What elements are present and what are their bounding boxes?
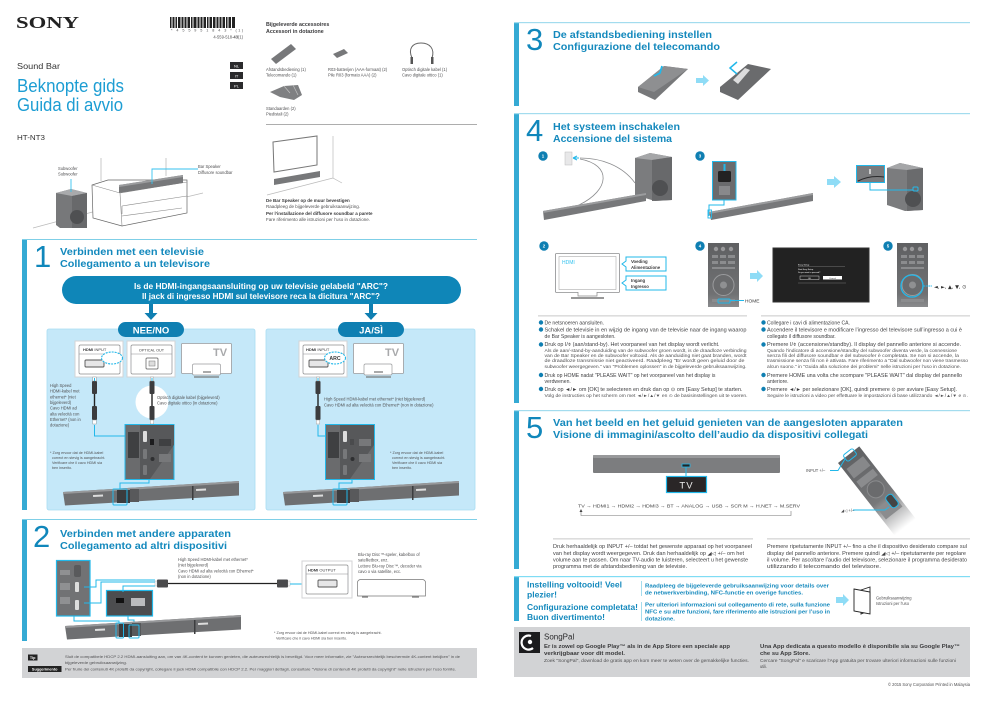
screen: easy setup: Cancel [829,278,836,280]
steps text: Italian: trasmissione senza fili non è attivata. Fare riferimento a "Dal subwoofer non viene trasmesso [767,358,969,363]
text: further information Dutch: Raadpleeg de bijgeleverde gebruiksaanwijzing voor details over [645,584,830,590]
accessory: optical cable [402,43,448,78]
step 3 badge [695,151,705,161]
label: HDMI cable: Cavo HDMI ad alta velocità con Ethernet* [178,568,254,573]
heading: setup complete: Configurazione completata! [527,602,638,612]
screen: easy setup: Do you want to proceed? [798,271,821,274]
illustration: plug in power cords [543,152,672,220]
card: optical out: OPTICAL OUT [139,348,165,352]
SongPal text: Dutch: Er is zowel op Google Play™ als in de App Store een speciale app [544,644,731,650]
label: direction keys: ◄, ►, ▲, ▼, ⊙ [934,284,966,290]
callout: input: Ingang [631,278,645,283]
label: HDMI cable: High Speed HDMI-kabel met ethernet* [178,557,248,562]
pill: NEE/NO [118,322,184,337]
heading: setup complete: Instelling voltooid! Veel [527,580,622,590]
instructions: Italian: display del pannello anteriore. Premere quindi ◢◁ +/– ripetutamente per regolare [767,551,966,557]
illustration: TV input HDMI [556,254,620,298]
steps text: Dutch: Schakel de televisie in en wijzig de ingang van de televisie naar de ingang waarop [544,328,747,334]
steps text: Italian: Seguire le istruzioni a video per effettuare le impostazioni di base utilizzando ◄/►/▲/▼ e ⊙. [767,393,968,398]
card: optical out [127,341,175,377]
label: subwoofer [58,166,78,176]
heading: setup complete: Buon divertimento! [527,612,605,622]
label: player device: Blu-ray Disc™-speler, kabelbox of [358,552,421,557]
rear panel detail [120,424,174,489]
SongPal text: Dutch: Zoek "SongPal", download de gratis app en kom meer te weten over de gemakkelijke functies. [544,658,749,663]
label: HDMI cable: alta velocità con [50,411,80,416]
label: player device: Lettore Blu-ray Disc™, decoder via [358,563,422,568]
sound bar front with display: TV [679,480,694,492]
icon: TV: TV [213,347,228,359]
illustration: wall-mounted bar speaker [267,136,342,195]
footnote: cable check: * Zorg ervoor dat de HDMI-kabel correct en stevig is aangebracht. [274,631,382,635]
wall-mount note: Fare riferimento alle istruzioni per l’uso in dotazione. [266,217,370,222]
screen: easy setup [773,248,869,302]
remote: battery compartment open [720,62,771,100]
section 5 heading [553,417,903,441]
footnote: cable check: * Zorg ervoor dat de HDMI-kabel [390,451,443,455]
SongPal text: Italian [760,644,960,669]
accessory: batteries [328,49,388,78]
step 1 badge [538,151,548,161]
sound bar front with display [593,455,780,492]
SongPal text: Italian: Una App dedicata a questo modello è disponibile sia su Google Play™ [760,644,960,650]
arrow [827,176,841,188]
screen: easy setup: Start Easy Setup. [798,268,814,271]
pill: JA/SI: JA/SÌ [359,326,383,336]
label: HDMI cable [178,557,254,579]
heading: supplied accessories: Bijgeleverde accessoires [266,22,329,28]
label: HDMI cable: HDMI-kabel met [50,389,80,394]
frame [514,576,519,621]
HDMI cable [155,580,290,588]
footer: © 2015 Sony Corporation Printed in Malaysia [888,682,971,687]
tip badge: Tip [30,656,36,660]
step 2 badge: 2 [543,244,546,249]
label: HDMI cable: (niet bijgeleverd) [178,563,209,568]
section 4 heading [553,122,680,145]
label: HDMI cable: Cavo HDMI ad [50,406,78,411]
model name: HT-NT3 [17,135,45,142]
language badges: IT [235,73,239,78]
card: HDMI input ARC: HDMI INPUT [306,347,330,352]
screen: easy setup: Easy Setup [798,264,810,266]
label: HDMI cable: ethernet* (niet [50,394,77,399]
footnote: cable check: correct en stevig is aangebracht. [392,456,445,460]
label: HDMI cable: dotazione) [50,423,70,428]
language badges: NL [234,63,240,68]
instructions: Italian: Premere ripetutamente INPUT +/– fino a che il dispositivo desiderato compare sul [767,544,967,550]
question pill: Is de HDMI-ingangsaansluiting op uw televisie gelabeld "ARC"? [134,282,388,291]
footnote: cable check: Verificare che il cavo HDMI sia [52,461,103,465]
footnote: cable check: Verificare che il cavo HDMI sia [392,461,443,465]
instructions: Dutch: volume aan te passen. Om naar TV-audio te luisteren, selecteert u het gewenste [553,558,748,564]
heading: SongPal: SongPal [544,632,574,642]
tip badge [28,654,38,660]
text: further information Italian: Per ulteriori informazioni sul collegamento di rete, sulla funzione [645,602,830,608]
label: HDMI cable [324,397,434,407]
question pill [62,276,461,304]
card: HDMI output [302,561,352,598]
step 2 badge [539,241,549,251]
cyan connection lines [74,580,315,625]
steps text: Dutch: de draadloze transmissie niet geactiveerd. Raadpleeg "Er wordt geen geluid door de [544,358,745,363]
SongPal text: Italian: Cercare "SongPal" e scaricare l’App gratuita per trovare ulteriori informazioni sulle funzioni [760,658,956,663]
bar speaker rear [65,615,241,640]
section: setup complete [514,576,970,622]
label: HDMI cable [50,383,81,428]
title [17,75,124,115]
section 2 heading: Collegamento ad altri dispositivi [60,541,227,552]
illustration: TV input HDMI: HDMI [562,260,575,266]
section 4: power on [514,113,970,403]
label: bar speaker: Bar Speaker [198,164,221,169]
label: volume: ◢◁ +/– [841,508,855,513]
footnote: cable check [390,451,445,470]
card: HDMI input [75,341,123,377]
steps text: Italian: alcun suono." in "Guida alla soluzione dei problemi" nelle istruzioni per l’uso in dotazione. [767,364,961,369]
instructions: Italian: utilizzando il telecomando del televisore. [767,564,881,570]
card: HDMI input ARC: ARC [329,356,341,362]
illustration: sound bar and subwoofer on TV stand [33,158,203,228]
label: HOME: HOME [745,298,759,304]
accessory: stands: Standaarden (2) [266,106,296,111]
tip text [65,655,460,672]
section 3 heading: De afstandsbediening instellen [553,30,712,41]
instructions: Dutch: van het display wordt weergegeven. Druk dan herhaaldelijk op ◢◁ +/– om het [553,551,745,557]
steps text: Dutch: van de Bar Speaker en de subwoofer voltooid. Als de aanduiding niet gaat branden, wordt [544,353,748,358]
step 3 badge: 3 [699,154,702,159]
steps text: Dutch: verdwenen. [544,379,571,385]
sony logo: SONY [16,13,79,32]
callout: power: Alimentazione [631,265,661,270]
section 1 number: 1 [34,239,51,274]
bar speaker rear [63,481,239,506]
label: HDMI cable: High Speed [50,383,72,388]
accessory: optical cable: Cavo digitale ottico (1) [402,72,443,78]
label: HDMI cable: Cavo HDMI ad alta velocità con Ethernet* (non in dotazione) [324,402,434,407]
wall-mount note: De Bar Speaker op de muur bevestigen [266,198,350,203]
section 3 frame [514,22,519,106]
heading: supplied accessories: Accessori in dotazione [266,29,324,35]
sound bar input panel [56,560,152,616]
steps text: Dutch: Druk op ◄/► om [OK] te selecteren en druk dan op ⊙ om [Easy Setup] te starten. [544,387,742,393]
steps text: Dutch: Volg de instructies op het scherm om met ◄/►/▲/▼ en ⊙ de basisinstellingen uit te voeren. [544,393,748,398]
remote: HOME button [708,243,744,307]
footnote: cable check: ben inserito. [52,466,72,470]
label: bar speaker [198,164,233,175]
step 5 badge [883,241,893,251]
callout: power [622,257,666,271]
section 4 heading: Het systeem inschakelen [553,122,680,133]
optical cable [150,377,154,442]
screen: easy setup: OK [808,278,812,280]
callout: power: Voeding [631,259,648,264]
steps text: Italian: anteriore. [767,379,789,385]
section 2 number: 2 [33,519,50,554]
instructions: Dutch: Druk herhaaldelijk op INPUT +/– totdat het gewenste apparaat op het voorpaneel [553,544,752,550]
footnote: cable check: ben inserito. [392,466,412,470]
panel: SongPal [514,627,970,677]
instructions: Italian: il volume. Per ascoltare l’audio del televisore, selezionare il programma desiderato [767,558,967,564]
SongPal text: Dutch: verkrijgbaar voor dit model. [544,651,626,657]
label: player device: satellietbox, enz. [358,558,388,563]
footnote: cable check: * Zorg ervoor dat de HDMI-kabel [50,451,103,455]
step 1 badge: 1 [542,154,545,159]
remote: direction keys [897,243,932,307]
tip text: Per fruire dei contenuti 4K protetti da copyright, collegare il jack HDMI compatibile con HDCP 2.2. Per maggiori dettagli, consultare "Visione di contenuti 4K protetti da copyright" nelle istruzioni per l’uso fornite. [65,668,456,672]
instructions: Italian [767,544,967,570]
label: input: INPUT +/– [806,468,826,473]
input cycle chain [578,504,800,516]
suggerimento badge: Suggerimento [32,668,58,672]
title: Guida di avvio [17,94,123,115]
section 2: connect other devices [22,519,477,641]
section 2 heading [60,529,231,552]
illustration: subwoofer indicator [856,163,923,211]
illustration: power button on sound bar [708,162,813,220]
label: optical cable: Optisch digitale kabel (bijgeleverd) [157,395,220,400]
callout: input [622,276,666,290]
section 2 heading: Verbinden met andere apparaten [60,529,231,540]
label: optical cable [157,395,220,406]
input cycle chain: TV → HDMI1 → HDMI2 → HDMI3 → BT → ANALOG → USB → SCR M → H.NET → M.SERV [578,504,800,508]
language badges: PL [234,83,240,88]
label: HDMI cable: Ethernet* (non in [50,417,81,422]
icon: TV [354,344,404,377]
title: Beknopte gids [17,75,124,96]
tip box [22,648,477,678]
section 5: enjoy connected devices [514,410,970,570]
step 5 badge: 5 [887,244,890,249]
arrow: yes [364,304,378,320]
label: manual: Istruzioni per l’uso [876,601,910,606]
steps text: Dutch: Als de aan/-stand-by-aanduiding van de subwoofer groen wordt, is de draadloze verbinding [544,348,747,353]
steps text: Italian: collegato il diffusore soundbar. [767,334,836,340]
question pill: Il jack di ingresso HDMI sul televisore reca la dicitura "ARC"? [142,292,380,301]
steps text: Dutch: Druk op HOME nadat "PLEASE WAIT" op het voorpaneel van het display is [544,373,716,379]
label: bar speaker: Diffusore soundbar [198,170,233,175]
icon: manual booklet [854,587,870,614]
steps text: Italian: Quando l’indicatore di accensione/standby del subwoofer diventa verde, la connessione [767,348,958,353]
heading: setup complete [527,580,638,622]
label: HDMI cable: High Speed HDMI-kabel met ethernet* (niet bijgeleverd) [324,397,426,402]
steps text: Italian: Premere ◄/► per selezionare [OK], quindi premere ⊙ per avviare [Easy Setup]. [767,387,957,393]
label: HDMI cable: (non in dotazione) [178,574,211,579]
tip text: bijgeleverde gebruiksaanwijzing. [65,661,127,665]
remote: battery cover closed [638,66,688,100]
accessory: stands [266,85,302,116]
footnote: cable check [274,631,382,640]
step 4 badge [695,241,705,251]
section 3 number: 3 [526,22,543,57]
accessory: batteries: Pile R03 (formato AAA) (2) [328,72,377,78]
steps text: Italian: senza fili del diffusore soundbar e del subwoofer è completata. Se non si accende, la [767,353,960,358]
steps text: Dutch: Druk op I/⌽ (aan/stand-by). Het voorpaneel van het display wordt verlicht. [544,342,720,348]
section 1 heading: Collegamento a un televisore [60,259,210,270]
HDMI cable [92,377,145,436]
card: HDMI input ARC [299,341,347,377]
section 5 heading: Van het beeld en het geluid genieten van de aangesloten apparaten [553,417,903,429]
steps text: Italian: Premere HOME una volta che scompare "PLEASE WAIT" dal display del pannello [767,373,962,379]
steps text: Italian: Accendere il televisore e modificare l’ingresso del televisore sull’ingresso a cui è [767,328,962,334]
accessory: optical cable: Optisch digitale kabel (1) [402,67,448,72]
HDMI cable [316,377,345,436]
label: manual: Gebruiksaanwijzing [876,596,912,600]
label: player device: cavo o via satellite, ecc. [358,569,401,574]
section 3: remote setup [514,22,970,106]
text: further information Dutch: de netwerkverbinding, NFC-functie en overige functies. [645,590,803,596]
steps text: Dutch: subwoofer weergegeven." van "Problemen oplossen" in de bijgeleverde gebruiksaanwijzing. [544,364,746,369]
steps text: Italian: Collegare i cavi di alimentazione CA. [767,320,850,326]
label: HDMI cable: bijgeleverd) [50,400,72,405]
section 5 heading: Visione di immagini/ascolto dell’audio da dispositivi collegati [553,429,868,441]
section 4 frame [514,113,519,403]
SongPal text: Dutch [544,644,749,663]
steps text: Dutch: de Bar Speaker is aangesloten. [544,334,616,340]
text: further information Italian [645,602,831,622]
section 4 number: 4 [526,113,543,148]
section 5 number: 5 [526,410,543,445]
bar speaker rear [283,481,459,506]
section 1 heading: Verbinden met een televisie [60,247,204,258]
label: subwoofer: Subwoofer [58,172,78,176]
heading: supplied accessories [266,22,329,35]
accessory: stands: Piedistali (2) [266,112,289,116]
steps text: Dutch: De netsnoeren aansluiten. [544,320,604,326]
wall-mount note: Raadpleeg de bijgeleverde gebruiksaanwijzing. [266,204,360,209]
section 3 heading [553,30,720,53]
arrow [750,270,763,282]
suggerimento badge [28,666,62,672]
footnote: cable check: correct en stevig is aangebracht. [52,456,105,460]
arrow [696,75,709,86]
label: subwoofer: Subwoofer [58,166,78,171]
callout: input: Ingresso [631,284,649,289]
pill: NEE/NO: NEE/NO [133,326,169,336]
barcode and part number: * 4 5 5 9 5 1 8 4 3 * (1) [171,28,244,32]
card: HDMI output: HDMI OUTPUT [308,568,336,572]
label: player device [358,552,422,574]
icon: SongPal [519,632,540,653]
label: optical cable: Cavo digitale ottico (in dotazione) [157,401,218,406]
arrow [836,594,849,606]
icon: TV [182,344,232,377]
steps text: Italian: Premere I/⌽ (accensione/standby). Il display del pannello anteriore si accende. [767,342,961,348]
icon: player device [358,580,426,597]
rear panel detail [326,424,374,489]
barcode and part number: 4-559-518-43(1) [213,34,244,40]
icon: TV: TV [385,347,400,359]
heading: setup complete: plezier! [527,590,557,600]
text: further information Italian: dotazione. [645,616,675,622]
panel: yes [266,322,475,510]
label: manual [876,596,912,606]
section 4 heading: Accensione del sistema [553,134,672,145]
instructions: Dutch [553,544,752,570]
white highlight circle [136,386,168,418]
accessory: remote control: Afstandsbediening (1) [266,67,306,72]
tip text: Sluit de compatibele HDCP 2.2 HDMI-aansluiting aan, om van 4K-content te kunnen genieten, die auteursrechtelijk is beveiligd. Voor meer informatie, zie "Auteursrechtelijk beschermde 4K-content bekijken" in de [65,655,460,659]
instructions: Dutch: programma met de afstandsbediening van de televisie. [553,564,687,570]
accessory: batteries: R03-batterijen (AAA-formaat) (2) [328,67,388,72]
pill: JA/SI [338,322,404,337]
wall-mount note: Per l’installazione del diffusore soundbar a parete [266,211,373,216]
barcode and part number [170,17,244,40]
panel: no [47,322,255,510]
section 1 heading [60,247,210,270]
text: further information Italian: NFC e su altre funzioni, fare riferimento alle istruzioni per l’uso in [645,610,831,616]
wall-mount note [266,198,373,222]
arrow: no [144,304,158,320]
section 5 frame [514,410,519,569]
SongPal text: Italian: utili. [760,664,767,669]
text: further information Dutch [645,584,830,596]
section 3 heading: Configurazione del telecomando [553,42,720,53]
section 1 frame [22,239,27,510]
section 1: connect to TV [22,239,477,510]
footnote: cable check: Verificare che il cavo HDMI sia ben inserito. [276,636,347,640]
accessory: remote control [266,44,306,78]
accessory: remote control: Telecomando (1) [266,72,297,78]
footnote: cable check [50,451,105,470]
product type heading: Sound Bar [17,61,60,71]
steps text: Italian [761,320,969,398]
section 2 frame [22,519,27,641]
step 4 badge: 4 [699,244,702,249]
remote: input and volume [830,446,916,535]
SongPal text: Italian: che su App Store. [760,651,811,657]
steps text: Dutch [539,320,748,398]
language badges [230,62,243,89]
card: HDMI input: HDMI INPUT [83,347,107,352]
